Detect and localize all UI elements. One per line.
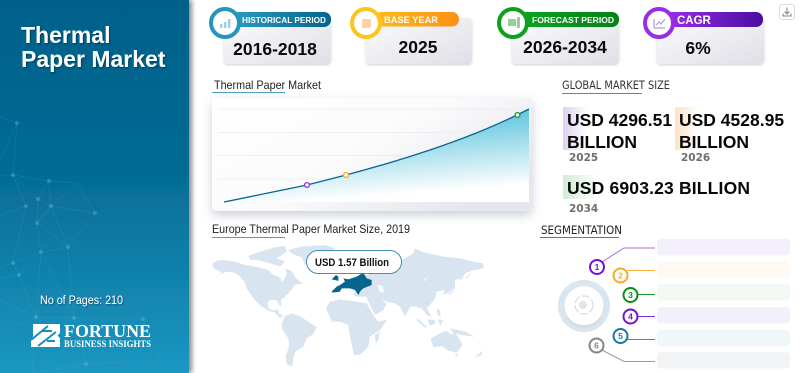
stat card: historical period: HISTORICAL PERIOD bbox=[242, 15, 326, 25]
numbered markers bbox=[590, 260, 638, 352]
panel: line chart bbox=[212, 98, 532, 211]
market size: 2026: 2026 bbox=[681, 152, 710, 164]
stat card: CAGR: 6% bbox=[685, 38, 711, 58]
stat card: CAGR: CAGR bbox=[677, 15, 712, 27]
area under curve bbox=[224, 109, 529, 202]
icon: download bbox=[780, 4, 794, 20]
market size: 2026: USD 4528.95 bbox=[679, 110, 784, 130]
market size: 2034: USD 6903.23 BILLION bbox=[567, 178, 750, 198]
title: Paper Market bbox=[21, 46, 166, 72]
stat card: base year: 2025 bbox=[399, 37, 438, 57]
data points bbox=[305, 113, 520, 187]
world map bbox=[210, 245, 483, 367]
highlighted region: Europe bbox=[332, 273, 372, 295]
stat card: forecast period bbox=[499, 9, 619, 64]
numbered markers: 1 bbox=[595, 262, 600, 272]
stat card: forecast period: 2026-2034 bbox=[523, 37, 607, 57]
numbered markers: 6 bbox=[594, 340, 599, 350]
stat card: forecast period: FORECAST PERIOD bbox=[532, 15, 614, 25]
stat card: historical period: 2016-2018 bbox=[233, 39, 317, 59]
stat card: base year bbox=[352, 9, 472, 64]
logo: BUSINESS INSIGHTS bbox=[64, 339, 151, 349]
market size: 2025: BILLION bbox=[567, 132, 637, 152]
market size: 2025: 2025 bbox=[569, 152, 598, 164]
market size: 2025 bbox=[563, 107, 672, 164]
market size: 2026 bbox=[675, 107, 784, 164]
connectors bbox=[602, 248, 655, 362]
logo bbox=[31, 321, 151, 349]
central icon bbox=[561, 283, 607, 329]
market size: 2026: BILLION bbox=[679, 132, 749, 152]
icon: calendar bbox=[362, 19, 371, 28]
numbered markers: 2 bbox=[618, 270, 623, 280]
heading: global market size: GLOBAL MARKET SIZE bbox=[562, 78, 670, 92]
text: number of pages: No of Pages: 210 bbox=[40, 295, 123, 307]
panel: segmentation graphic bbox=[561, 239, 790, 368]
numbered markers: 3 bbox=[628, 290, 633, 300]
stat card: base year: BASE YEAR bbox=[384, 15, 439, 25]
heading: europe market size: Europe Thermal Paper Market Size, 2019 bbox=[212, 222, 410, 236]
trend line bbox=[224, 109, 529, 202]
numbered markers: 4 bbox=[628, 312, 633, 322]
icon: forecast screen bbox=[508, 17, 520, 28]
callout: USD 1.57 Billion bbox=[315, 257, 389, 269]
market size: 2034: 2034 bbox=[569, 203, 598, 215]
stat card: historical period bbox=[211, 9, 331, 64]
numbered markers: 5 bbox=[618, 331, 623, 341]
network pattern bbox=[0, 117, 160, 373]
heading: thermal paper market: Thermal Paper Market bbox=[214, 78, 322, 92]
logo: FORTUNE bbox=[64, 321, 151, 341]
segment rows bbox=[657, 239, 790, 368]
heading: segmentation: SEGMENTATION bbox=[541, 223, 622, 237]
icon: growth chart bbox=[654, 19, 665, 28]
stat card: CAGR bbox=[645, 9, 764, 64]
market size: 2025: USD 4296.51 bbox=[567, 110, 672, 130]
icon: bar chart bbox=[220, 19, 230, 28]
callout bbox=[306, 250, 402, 274]
market size: 2034 bbox=[563, 175, 750, 215]
panel: sidebar bbox=[0, 0, 189, 373]
title: Thermal bbox=[21, 22, 110, 48]
